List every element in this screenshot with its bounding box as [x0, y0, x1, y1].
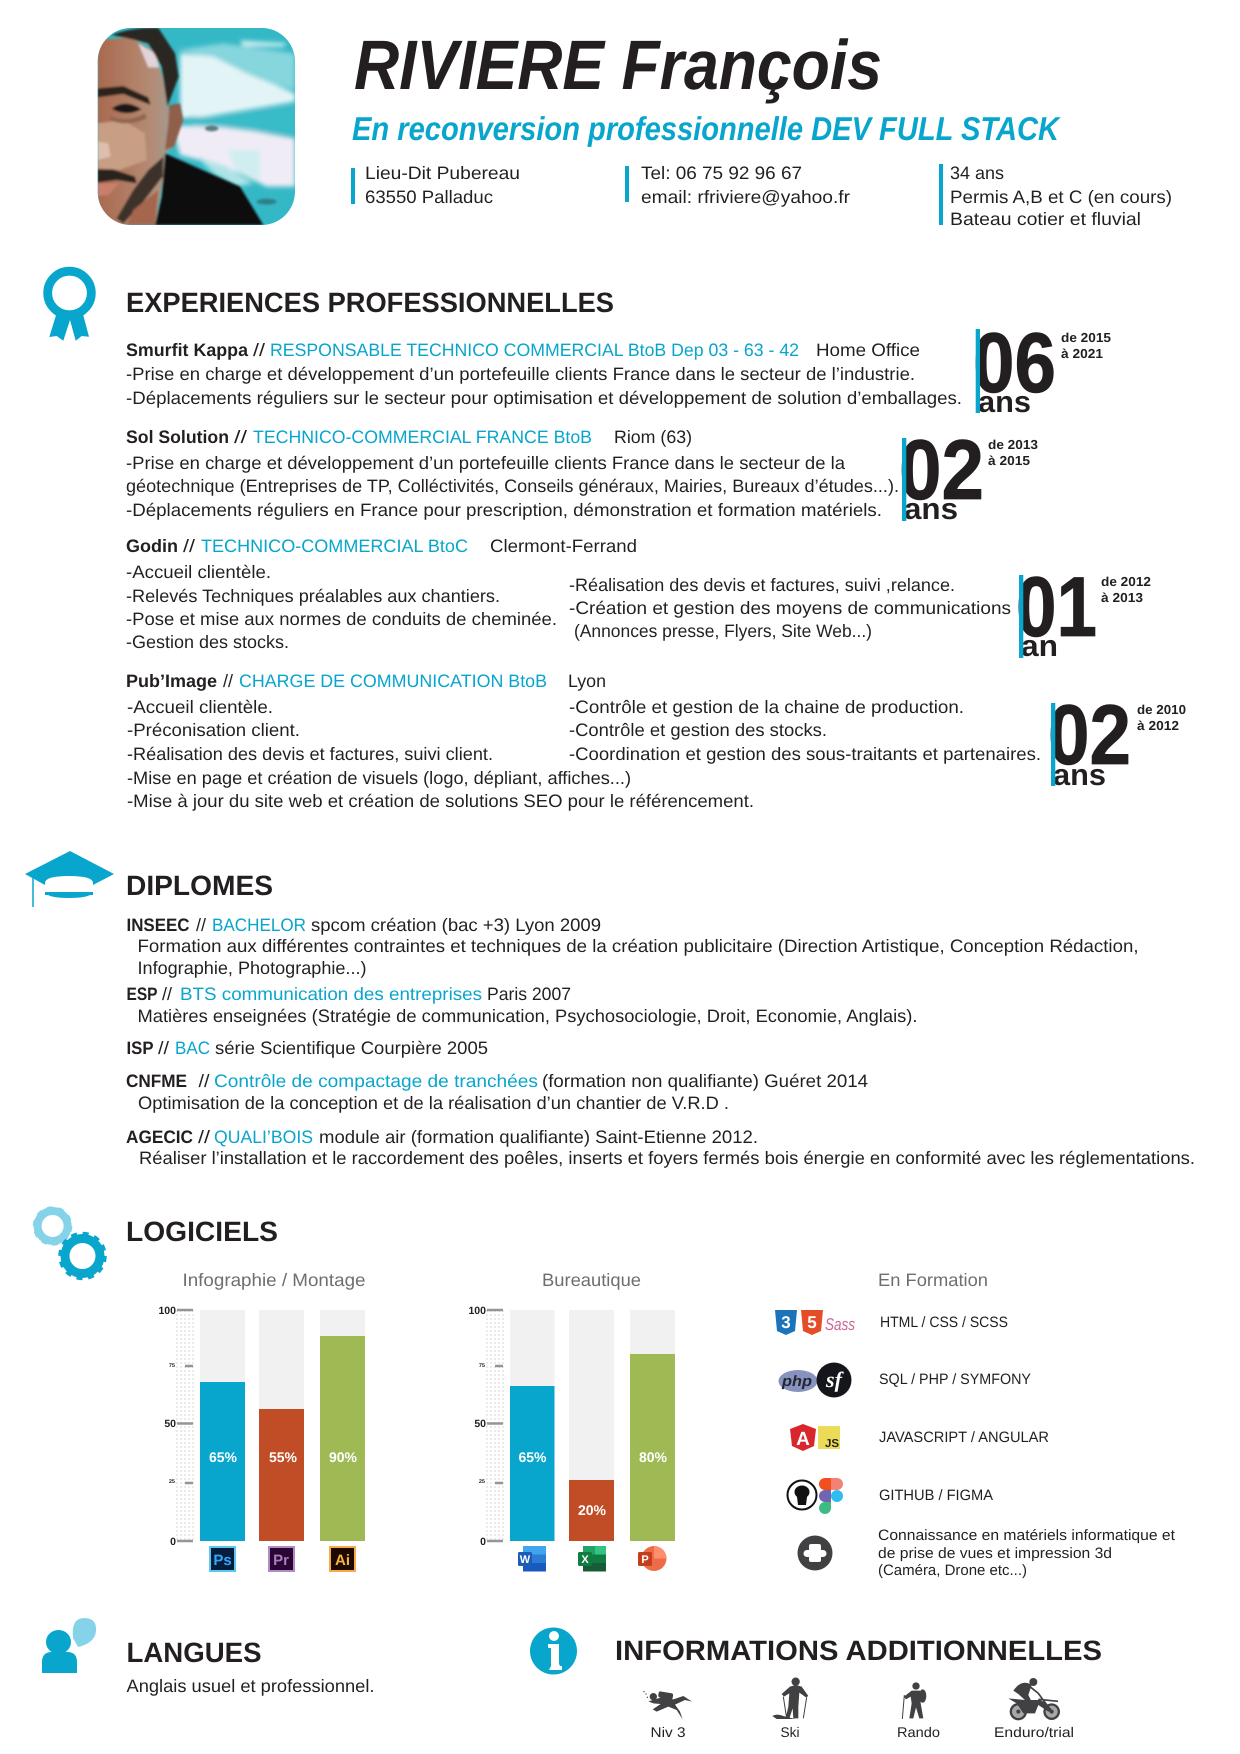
duration: 02 ans: à 2015: [988, 453, 1030, 468]
job: Smurfit Kappa: Smurfit Kappa: [126, 340, 249, 360]
job: Godin: TECHNICO-COMMERCIAL BtoC: [201, 536, 468, 556]
label: SQL PHP SYMFONY: SQL / PHP / SYMFONY: [879, 1371, 1031, 1388]
heading: software: LOGICIELS: [126, 1216, 278, 1247]
diploma: INSEEC: Formation aux différentes contraintes et techniques de la création publicitaire (Direction Artistique, Conception Rédaction,: [138, 936, 1138, 956]
icon: Photoshop: [210, 1547, 235, 1571]
text: hardware knowledge: Connaissance en matériels informatique et: [878, 1527, 1176, 1544]
text: languages: Anglais usuel et professionnel.: [126, 1676, 374, 1696]
job: Pub'Image: CHARGE DE COMMUNICATION BtoB: [239, 671, 547, 691]
duration: 02 ans: ans: [904, 493, 958, 526]
chart title: Infographie: Infographie / Montage: [182, 1270, 366, 1290]
diploma: ISP: BAC: [175, 1038, 210, 1058]
icon: Premiere: Pr: [273, 1552, 289, 1569]
bar chart: Bureautique: 75: [479, 1363, 485, 1369]
duration: 06 ans: à 2021: [1061, 346, 1103, 361]
icon: graduation cap: [25, 851, 114, 907]
contact: phone and email: email: rfriviere@yahoo.fr: [641, 187, 850, 207]
icon: Word: W: [520, 1554, 531, 1566]
job: Pub'Image: -Contrôle et gestion des stocks.: [569, 720, 827, 740]
icon: PowerPoint: P: [641, 1554, 649, 1566]
activity: hiking: [897, 1682, 940, 1740]
contact: personal details: Bateau cotier et fluvial: [950, 209, 1141, 229]
diploma: ESP: //: [162, 984, 172, 1004]
icon: Excel: X: [581, 1554, 589, 1566]
diploma: ESP: Paris 2007: [487, 984, 571, 1004]
duration: 01 an: de 2012: [1101, 574, 1151, 589]
icon: gears: [35, 1208, 105, 1278]
text: hardware knowledge: [878, 1527, 1176, 1579]
diploma: CNFME: (formation non qualifiante) Guéret 2014: [542, 1071, 868, 1091]
header: [98, 26, 1172, 229]
job: Smurfit Kappa: [126, 340, 962, 408]
job: Smurfit Kappa: Home Office: [816, 340, 920, 360]
duration: 01 an: [1016, 560, 1151, 663]
duration: 06 ans: ans: [978, 386, 1031, 419]
activity: enduro: [994, 1678, 1074, 1740]
subtitle: En reconversion professionnelle DEV FULL STACK: [352, 110, 1061, 147]
bar chart: Infographie / Montage: 0: [170, 1536, 176, 1548]
icons: PHP, Symfony: php: [781, 1373, 812, 1390]
duration: 02 ans: ans: [1053, 759, 1106, 792]
bar chart: Infographie / Montage: 100: [158, 1305, 176, 1317]
job: Pub'Image: //: [223, 671, 233, 691]
contact: address: 63550 Palladuc: [365, 187, 493, 207]
duration: 01 an: 01: [1016, 560, 1097, 655]
job: Sol Solution: TECHNICO-COMMERCIAL FRANCE BtoB: [253, 427, 592, 447]
duration: 02 ans: 02: [899, 423, 984, 518]
job: Pub'Image: -Mise à jour du site web et création de solutions SEO pour le référencement.: [127, 791, 754, 811]
name: RIVIERE François: [354, 26, 882, 104]
diploma: CNFME: Contrôle de compactage de tranchées: [214, 1071, 538, 1091]
icons: CSS, HTML, Sass: Sass: [825, 1315, 855, 1334]
diploma: ESP: ESP: [126, 984, 158, 1004]
bar: Excel 20%: [569, 1480, 614, 1541]
chart title: Bureautique: Bureautique: [542, 1270, 641, 1290]
job: Godin: -Pose et mise aux normes de conduits de cheminée.: [126, 609, 557, 629]
duration: 02 ans: [899, 423, 1038, 526]
bar chart: Bureautique: 50: [474, 1418, 486, 1430]
icon: Illustrator: Ai: [335, 1552, 350, 1569]
icon: Photoshop: Ps: [213, 1552, 232, 1569]
icon: speaking person: [42, 1618, 96, 1673]
job: Pub'Image: -Réalisation des devis et factures, suivi client.: [127, 744, 493, 764]
duration: 02 ans: de 2010: [1137, 702, 1186, 717]
duration: 02 ans: 02: [1048, 688, 1131, 783]
duration: 02 ans: à 2012: [1137, 718, 1179, 733]
diploma: ISP: //: [158, 1038, 169, 1058]
bar chart: Bureautique: [468, 1305, 675, 1572]
job: Sol Solution: -Déplacements réguliers en France pour prescription, démonstration et formation matériels.: [126, 500, 882, 520]
bar: Word 65%: [510, 1386, 554, 1541]
panel: software: [35, 1208, 1176, 1579]
bar: Photoshop 65%: 65%: [209, 1449, 238, 1465]
contact: personal details: Permis A,B et C (en cours): [950, 187, 1172, 207]
bar chart: Bureautique: 25: [479, 1479, 485, 1485]
job: Godin: //: [183, 536, 195, 556]
bar: Excel 20%: 20%: [578, 1502, 607, 1518]
icon: ribbon: [48, 271, 91, 341]
contact: address: Lieu-Dit Pubereau: [365, 163, 520, 183]
diploma: INSEEC: spcom création (bac +3) Lyon 2009: [311, 915, 601, 935]
icons: GitHub, Figma: [788, 1478, 843, 1514]
icons: PHP, Symfony: [778, 1362, 852, 1398]
job: Pub'Image: -Contrôle et gestion de la chaine de production.: [569, 697, 964, 717]
job: Pub'Image: [126, 671, 1041, 811]
job: Pub'Image: Lyon: [568, 671, 606, 691]
label: HTML CSS SCSS: HTML / CSS / SCSS: [880, 1314, 1008, 1331]
icon: PowerPoint: [638, 1546, 666, 1571]
contact: personal details: 34 ans: [950, 163, 1004, 183]
panel: experiences: [48, 271, 1186, 811]
job: Sol Solution: -Prise en charge et développement d’un portefeuille clients France dans le secteur de la: [126, 453, 846, 473]
bar chart: Infographie / Montage: 50: [164, 1418, 176, 1430]
job: Sol Solution: //: [234, 427, 247, 447]
diploma: ESP: BTS communication des entreprises: [180, 984, 482, 1004]
bar chart: Bureautique: 100: [468, 1305, 486, 1317]
bar: Word 65%: 65%: [518, 1449, 547, 1465]
bar: Premiere 55%: 55%: [269, 1449, 298, 1465]
column title: En Formation: En Formation: [878, 1270, 988, 1290]
duration: 06 ans: de 2015: [1061, 330, 1111, 345]
duration: 01 an: à 2013: [1101, 590, 1143, 605]
photo portrait: [98, 28, 295, 225]
diploma: ESP: [126, 984, 918, 1026]
bar: Photoshop 65%: [200, 1382, 245, 1541]
bar: Premiere 55%: [259, 1409, 304, 1541]
panel: diplomas: [25, 851, 1195, 1168]
duration: 06 ans: [973, 316, 1111, 419]
contact: phone and email: Tel: 06 75 92 96 67: [641, 163, 802, 183]
job: Godin: -Relevés Techniques préalables aux chantiers.: [126, 586, 500, 606]
activity: ski: [772, 1677, 808, 1740]
icon: Excel: [578, 1546, 606, 1572]
job: Pub'Image: -Préconisation client.: [127, 720, 300, 740]
job: Godin: (Annonces presse, Flyers, Site Web...): [574, 621, 872, 641]
contact: personal details: [939, 163, 1172, 229]
diploma: INSEEC: BACHELOR: [212, 915, 306, 935]
bar chart: Bureautique: 0: [480, 1536, 486, 1548]
icons: Angular, JavaScript: A: [796, 1429, 810, 1450]
diploma: AGECIC: module air (formation qualifiante) Saint-Etienne 2012.: [319, 1127, 758, 1147]
diploma: ISP: ISP: [126, 1038, 154, 1058]
heading: additional information: INFORMATIONS ADDITIONNELLES: [615, 1635, 1102, 1666]
icons: Angular, JavaScript: JS: [825, 1438, 839, 1450]
job: Godin: Clermont-Ferrand: [490, 536, 637, 556]
job: Sol Solution: Sol Solution: [126, 427, 229, 447]
icons: CSS, HTML, Sass: 3: [781, 1313, 791, 1332]
icon: Word: [518, 1546, 546, 1572]
diploma: INSEEC: Infographie, Photographie...): [138, 958, 366, 978]
job: Godin: -Réalisation des devis et factures, suivi ,relance.: [569, 575, 955, 595]
duration: 02 ans: [1048, 688, 1186, 792]
icons: Angular, JavaScript: [790, 1424, 840, 1451]
duration: 06 ans: 06: [973, 316, 1056, 411]
label: Enduro/trial: Enduro/trial: [994, 1724, 1074, 1740]
duration: 02 ans: de 2013: [988, 437, 1038, 452]
job: Godin: Godin: [126, 536, 178, 556]
job: Sol Solution: [126, 427, 899, 520]
label: GITHUB FIGMA: GITHUB / FIGMA: [879, 1487, 993, 1504]
duration: 01 an: an: [1021, 630, 1058, 663]
bar: PowerPoint 80%: [630, 1354, 675, 1541]
panel: languages: [42, 1618, 374, 1696]
icon: Premiere: [269, 1547, 294, 1571]
diploma: AGECIC: //: [198, 1127, 210, 1147]
diploma: CNFME: Optimisation de la conception et de la réalisation d’un chantier de V.R.D .: [138, 1093, 729, 1113]
bar: Illustrator 90%: [320, 1336, 365, 1541]
contact: phone and email: [625, 163, 850, 207]
heading: experiences: EXPERIENCES PROFESSIONNELLES: [126, 287, 614, 318]
diploma: ESP: Matières enseignées (Stratégie de communication, Psychosociologie, Droit, Economie, Anglais).: [138, 1006, 918, 1026]
job: Pub'Image: -Coordination et gestion des sous-traitants et partenaires.: [569, 744, 1041, 764]
icon: info: [530, 1628, 577, 1674]
text: hardware knowledge: de prise de vues et impression 3d: [878, 1545, 1112, 1562]
label: Rando: Rando: [897, 1724, 940, 1740]
icon: Illustrator: [330, 1547, 355, 1571]
job: Smurfit Kappa: -Prise en charge et développement d’un portefeuille clients France dans le secteur de l’industrie.: [126, 364, 915, 384]
diploma: INSEEC: //: [196, 915, 206, 935]
icon: plus: [798, 1536, 832, 1570]
job: Smurfit Kappa: //: [253, 340, 265, 360]
diploma: CNFME: //: [198, 1071, 210, 1091]
diploma: CNFME: CNFME: [126, 1071, 187, 1091]
label: JAVASCRIPT ANGULAR: JAVASCRIPT / ANGULAR: [879, 1429, 1049, 1446]
bar: Illustrator 90%: 90%: [329, 1449, 358, 1465]
bar: PowerPoint 80%: 80%: [639, 1449, 668, 1465]
job: Godin: -Accueil clientèle.: [126, 562, 271, 582]
job: Pub'Image: -Accueil clientèle.: [127, 697, 273, 717]
job: Pub'Image: Pub’Image: [126, 671, 217, 691]
job: Smurfit Kappa: -Déplacements réguliers sur le secteur pour optimisation et développement de solution d’emballages.: [126, 388, 962, 408]
diploma: AGECIC: Réaliser l’installation et le raccordement des poêles, inserts et foyers fermés bois énergie en conformité avec les réglementations.: [139, 1148, 1195, 1168]
label: Ski: Ski: [780, 1724, 800, 1740]
diploma: INSEEC: [126, 915, 1138, 978]
job: Godin: -Création et gestion des moyens de communications: [569, 598, 1011, 618]
label: Niv 3: Niv 3: [650, 1724, 686, 1740]
diploma: AGECIC: [126, 1127, 1195, 1168]
diploma: AGECIC: QUALI’BOIS: [214, 1127, 313, 1147]
diploma: INSEEC: INSEEC: [126, 915, 190, 935]
diploma: CNFME: [126, 1071, 868, 1113]
job: Godin: -Gestion des stocks.: [126, 632, 289, 652]
activity: diving: [643, 1691, 692, 1740]
job: Smurfit Kappa: RESPONSABLE TECHNICO COMMERCIAL BtoB Dep 03 - 63 - 42: [270, 340, 799, 360]
job: Godin: [126, 536, 1011, 652]
icons: CSS, HTML, Sass: [775, 1310, 855, 1335]
icons: CSS, HTML, Sass: 5: [807, 1313, 817, 1332]
diploma: AGECIC: AGECIC: [126, 1127, 193, 1147]
bar chart: Infographie / Montage: 75: [169, 1363, 175, 1369]
panel: additional information: [530, 1628, 1102, 1740]
bar chart: Infographie / Montage: 25: [169, 1479, 175, 1485]
bar chart: Infographie / Montage: [158, 1305, 365, 1571]
icons: PHP, Symfony: sf: [825, 1367, 845, 1392]
text: hardware knowledge: (Caméra, Drone etc...): [878, 1562, 1027, 1579]
job: Sol Solution: Riom (63): [614, 427, 692, 447]
job: Sol Solution: géotechnique (Entreprises de TP, Colléctivités, Conseils généraux, Mairies, Bureaux d’études...).: [126, 476, 899, 496]
heading: diplomas: DIPLOMES: [126, 870, 273, 901]
heading: languages: LANGUES: [126, 1637, 262, 1668]
diploma: ISP: série Scientifique Courpière 2005: [215, 1038, 488, 1058]
contact: address: [351, 163, 520, 207]
job: Pub'Image: -Mise en page et création de visuels (logo, dépliant, affiches...): [127, 768, 631, 788]
